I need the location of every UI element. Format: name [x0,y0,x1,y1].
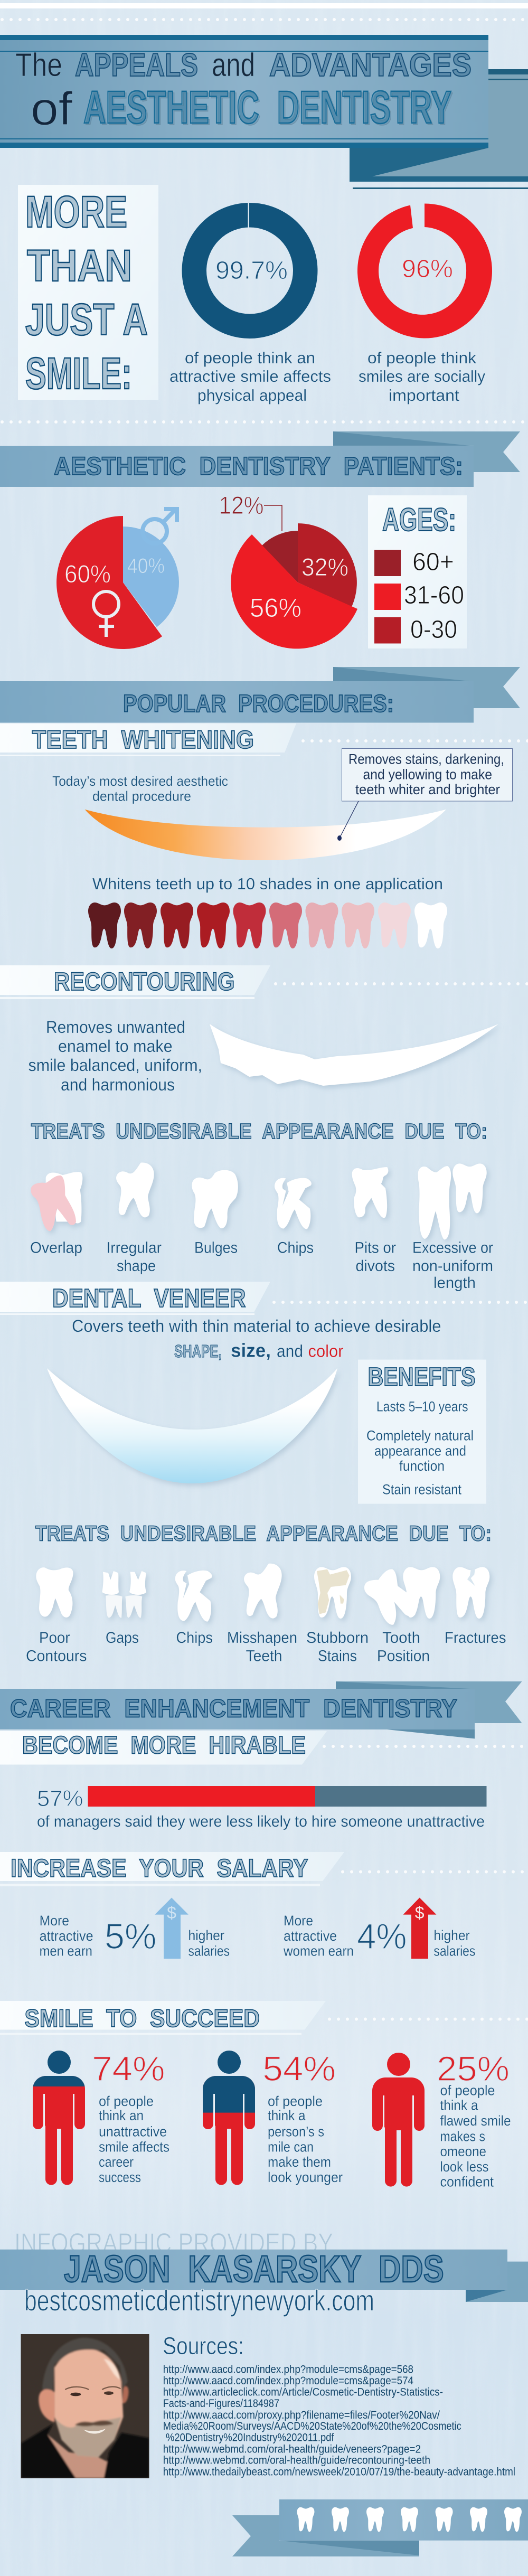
footer ribbon with teeth [232,2499,528,2556]
legend: ages: 60+ [412,548,454,576]
heading: teeth whitening: TEETH WHITENING [32,726,254,754]
donut chart: 96 percent: 96% [402,255,453,283]
banner: popular procedures [0,667,520,722]
caption: socially important [359,349,485,405]
text: most desired procedure [52,773,228,804]
text: source urls: http://www.aacd.com/index.php?module=cms&page=568 [163,2363,413,2375]
caption: socially important: of people think [367,349,477,367]
icon: overlap [31,1172,82,1231]
text: source urls [163,2363,515,2478]
title banner [0,35,528,189]
text: source urls: %20Dentistry%20Industry%202011.pdf [166,2431,334,2444]
icon: bulges [192,1170,238,1228]
pie chart: gender [56,509,179,649]
chart: 57 percent of managers [37,1786,487,1830]
labels: veneer conditions: Teeth [246,1648,282,1665]
banner: jason kasarsky dds [0,2249,528,2302]
banner: jason kasarsky dds: JASON KASARSKY DDS [64,2249,444,2290]
icon: chips [175,1571,212,1622]
heading: dental veneer: DENTAL VENEER [52,1284,246,1313]
labels: recontouring conditions: shape [117,1257,156,1275]
labels: recontouring conditions: Irregular [107,1239,162,1257]
stat: women salary: attractive [284,1928,337,1944]
text: source urls: http://www.articleclick.com/Article/Cosmetic-Dentistry-Statistics- [163,2386,443,2399]
caption: physical appeal: physical appeal [197,386,307,405]
icon: up arrow, red: $ [415,1903,425,1922]
donut chart: 99.7 percent: 99.7% [215,257,288,285]
labels: recontouring conditions: divots [356,1257,395,1275]
chart: ten tooth shades [88,902,447,948]
labels: veneer conditions: Chips [176,1629,213,1647]
labels: recontouring conditions: length [433,1274,476,1292]
icon: gaps [102,1571,146,1618]
callout: removes stains: and yellowing to make [363,767,492,783]
text: veneer description: size, [231,1339,271,1361]
stat: 74 percent career success [33,2049,169,2185]
text: recontouring description: enamel to make [58,1037,172,1056]
panel: more than just a smile: THAN [27,241,132,290]
stat: women salary: 4% [357,1916,407,1957]
labels: veneer conditions [26,1629,506,1665]
donut chart: 96 percent [357,203,492,338]
pie chart: gender: 40% [127,554,165,578]
heading: smile to succeed [0,2001,326,2035]
text: website: bestcosmeticdentistrynewyork.com [24,2284,374,2317]
panel: benefits: Lasts 5–10 years [376,1398,468,1414]
stat: 25 percent less confident: look less [440,2159,489,2175]
stat: women salary: salaries [433,1943,475,1959]
labels: veneer conditions: Fractures [445,1629,506,1647]
heading: recontouring: RECONTOURING [54,968,234,996]
icon: male symbol [143,509,177,543]
icon: fractures [452,1567,489,1619]
stat: men salary: 5% [105,1916,156,1957]
stat: 54 percent look younger [203,2049,343,2185]
stat: 25 percent less confident: confident [440,2174,494,2189]
legend: ages [368,495,467,648]
labels: recontouring conditions: Excessive or [412,1239,493,1257]
text: veneer description: and [277,1341,303,1360]
icon: tooth position [364,1567,440,1625]
legend: ages: AGES: [382,502,456,538]
stat: 74 percent career success: career [99,2154,134,2170]
text: source urls: Media%20Room/Surveys/AACD%20State%20of%20the%20Cosmetic [163,2420,461,2432]
caption: socially important: smiles are socially [359,367,485,386]
heading: increase your salary: INCREASE YOUR SALARY [11,1855,308,1883]
chart: 57 percent of managers: of managers said they were less likely to hire someone unattractive [37,1813,485,1830]
callout: removes stains: Removes stains, darkening, [348,751,504,767]
banner: career enhancement dentistry: CAREER ENHANCEMENT DENTISTRY [10,1695,457,1723]
labels: veneer conditions: Gaps [106,1629,139,1647]
heading: dental veneer [0,1282,270,1315]
stat: men salary [40,1898,230,1959]
banner: aesthetic dentistry patients: AESTHETIC DENTISTRY PATIENTS: [54,453,463,481]
caption: socially important: important [389,386,459,405]
icon: stubborn stains [314,1567,351,1619]
panel: benefits: Completely natural [366,1428,474,1444]
panel: benefits: appearance and [374,1443,466,1459]
labels: recontouring conditions: Chips [277,1239,314,1257]
pie chart: ages: 56% [250,593,301,623]
text: whitens ten shades: Whitens teeth up to 10 shades in one application [92,875,443,893]
text: recontouring description: Removes unwanted [46,1018,185,1037]
stat: men salary: men earn [40,1943,92,1959]
stat: men salary: More [40,1913,69,1929]
panel: benefits: Stain resistant [382,1482,461,1498]
text: most desired procedure: dental procedure [92,788,191,804]
labels: veneer conditions: Misshapen [227,1629,297,1647]
stat: 54 percent look younger: look younger [268,2169,343,2185]
panel: more than just a smile: MORE [25,187,127,237]
text: source urls: http://www.aacd.com/index.php?module=cms&page=574 [163,2375,413,2387]
text: recontouring description: smile balanced, uniform, [29,1056,202,1075]
stat: men salary: higher [188,1928,224,1943]
labels: recontouring conditions: Overlap [30,1239,82,1257]
title text line one: The [15,47,62,83]
legend: ages: 31-60 [404,581,464,609]
heading: become more hirable: BECOME MORE HIRABLE [22,1731,306,1759]
icon: up arrow, blue: $ [167,1903,176,1922]
labels: veneer conditions: Position [377,1648,430,1665]
heading: recontouring [0,965,270,999]
panel: more than just a smile: JUST A [25,295,148,344]
stat: 54 percent look younger: person’s s [268,2124,324,2140]
callout: removes stains [337,749,512,841]
stat: 54 percent look younger: think a [268,2108,306,2123]
icon: person, 54 percent filled [203,2051,255,2185]
icon: irregular shape [116,1162,154,1217]
donut chart: 99.7 percent [194,202,305,326]
icon: excessive length [418,1163,487,1239]
text: source urls: http://www.webmd.com/oral-health/guide/veneers?page=2 [163,2443,421,2455]
title text line one [15,47,472,83]
icon: female symbol [93,591,119,637]
heading: sources: Sources: [163,2332,244,2359]
labels: veneer conditions: Tooth [382,1629,420,1647]
text: veneer description [72,1317,441,1361]
panel: more than just a smile: SMILE: [25,349,132,398]
illustration: whitening smile [85,810,446,860]
icon: misshapen teeth [244,1564,282,1619]
title text line one: APPEALS [75,47,198,83]
icon: poor contours [36,1567,73,1618]
text: veneer description: SHAPE, [174,1341,222,1361]
labels: veneer conditions: Stubborn [306,1629,369,1647]
heading: smile to succeed: SMILE TO SUCCEED [24,2004,260,2032]
icon: up arrow, blue [155,1898,188,1959]
stat: 74 percent career success: think an [99,2108,144,2123]
caption: physical appeal: of people think an [185,349,315,367]
panel: more than just a smile [18,185,158,400]
pie chart: ages [219,491,357,648]
stat: women salary: women earn [283,1943,354,1959]
pie chart: gender: 60% [64,560,111,588]
text: source urls: http://www.aacd.com/proxy.php?filename=files/Footer%20Nav/ [163,2409,440,2421]
panel: benefits [358,1360,486,1504]
labels: recontouring conditions: non-uniform [412,1257,493,1275]
stat: 25 percent less confident: of people [440,2082,495,2098]
panel: benefits: function [399,1458,445,1474]
stat: women salary: higher [433,1928,470,1943]
photo: portrait of the dentist [21,2334,149,2478]
icon: chips [275,1178,312,1229]
text: most desired procedure: Today’s most desired aesthetic [52,773,228,789]
stat: 54 percent look younger: of people [268,2093,323,2109]
stat: men salary: attractive [40,1928,93,1944]
stat: 74 percent career success: unattractive [99,2124,167,2140]
chart: 57 percent of managers: 57% [37,1786,83,1811]
labels: recontouring conditions: Pits or [355,1239,396,1257]
labels: veneer conditions: Contours [26,1648,87,1665]
stat: 54 percent look younger: mile can [268,2139,314,2155]
stat: 25 percent less confident: flawed smile [440,2113,511,2129]
legend: ages: 0-30 [410,616,457,644]
stat: women salary: More [284,1913,313,1929]
icon: person, 74 percent filled [33,2051,85,2185]
text: veneer description: color [308,1341,344,1360]
stat: 74 percent career success: success [99,2169,141,2185]
illustration: uneven smile [210,1024,498,1086]
stat: 25 percent less confident: 25% [437,2049,510,2088]
text: recontouring description: and harmonious [61,1075,175,1094]
pie chart: ages: 12% [219,491,264,519]
icons: veneer conditions [36,1564,489,1625]
labels: recontouring conditions [30,1239,493,1292]
text: veneer description: Covers teeth with thin material to achieve desirable [72,1317,441,1336]
stat: 25 percent less confident: think a [440,2098,478,2113]
title text line one: and [212,47,255,83]
labels: recontouring conditions: Bulges [194,1239,238,1257]
title text line two: of [31,82,73,135]
stat: 25 percent less confident: omeone [440,2143,486,2159]
stat: 54 percent look younger: make them [268,2154,331,2170]
banner: popular procedures: POPULAR PROCEDURES: [123,690,394,717]
stat: 74 percent career success: of people [99,2093,154,2109]
pie chart: ages: 32% [301,553,348,581]
labels: veneer conditions: Poor [39,1629,70,1647]
stat: 25 percent less confident: makes s [440,2128,485,2144]
icon: person, 25 percent [372,2053,425,2187]
stat: 54 percent look younger: 54% [262,2049,336,2088]
stat: 25 percent less confident [372,2049,511,2189]
labels: veneer conditions: Stains [318,1648,357,1665]
panel: benefits: BENEFITS [367,1363,475,1392]
callout: removes stains: teeth whiter and brighter [355,782,500,797]
stat: 74 percent career success: 74% [92,2049,165,2088]
stat: women salary [283,1898,475,1959]
text: infographic provided by: INFOGRAPHIC PROVIDED BY [14,2228,333,2259]
caption: physical appeal: attractive smile affects [169,367,331,386]
icons: recontouring conditions [31,1162,487,1239]
stat: 74 percent career success: smile affects [99,2139,169,2155]
icon: up arrow, red [403,1898,436,1959]
text: source urls: http://www.webmd.com/oral-health/guide/recontouring-teeth [163,2455,430,2467]
text: source urls: Facts-and-Figures/1184987 [163,2398,279,2410]
caption: physical appeal [169,349,331,405]
text: recontouring description [29,1018,202,1094]
title text line one: ADVANTAGES [269,47,472,83]
icon: pits or divots [352,1167,388,1218]
stat: men salary: salaries [188,1943,230,1959]
banner: career enhancement dentistry [0,1681,522,1738]
banner: aesthetic dentistry patients [0,431,520,487]
illustration: veneer smile [47,1368,337,1483]
